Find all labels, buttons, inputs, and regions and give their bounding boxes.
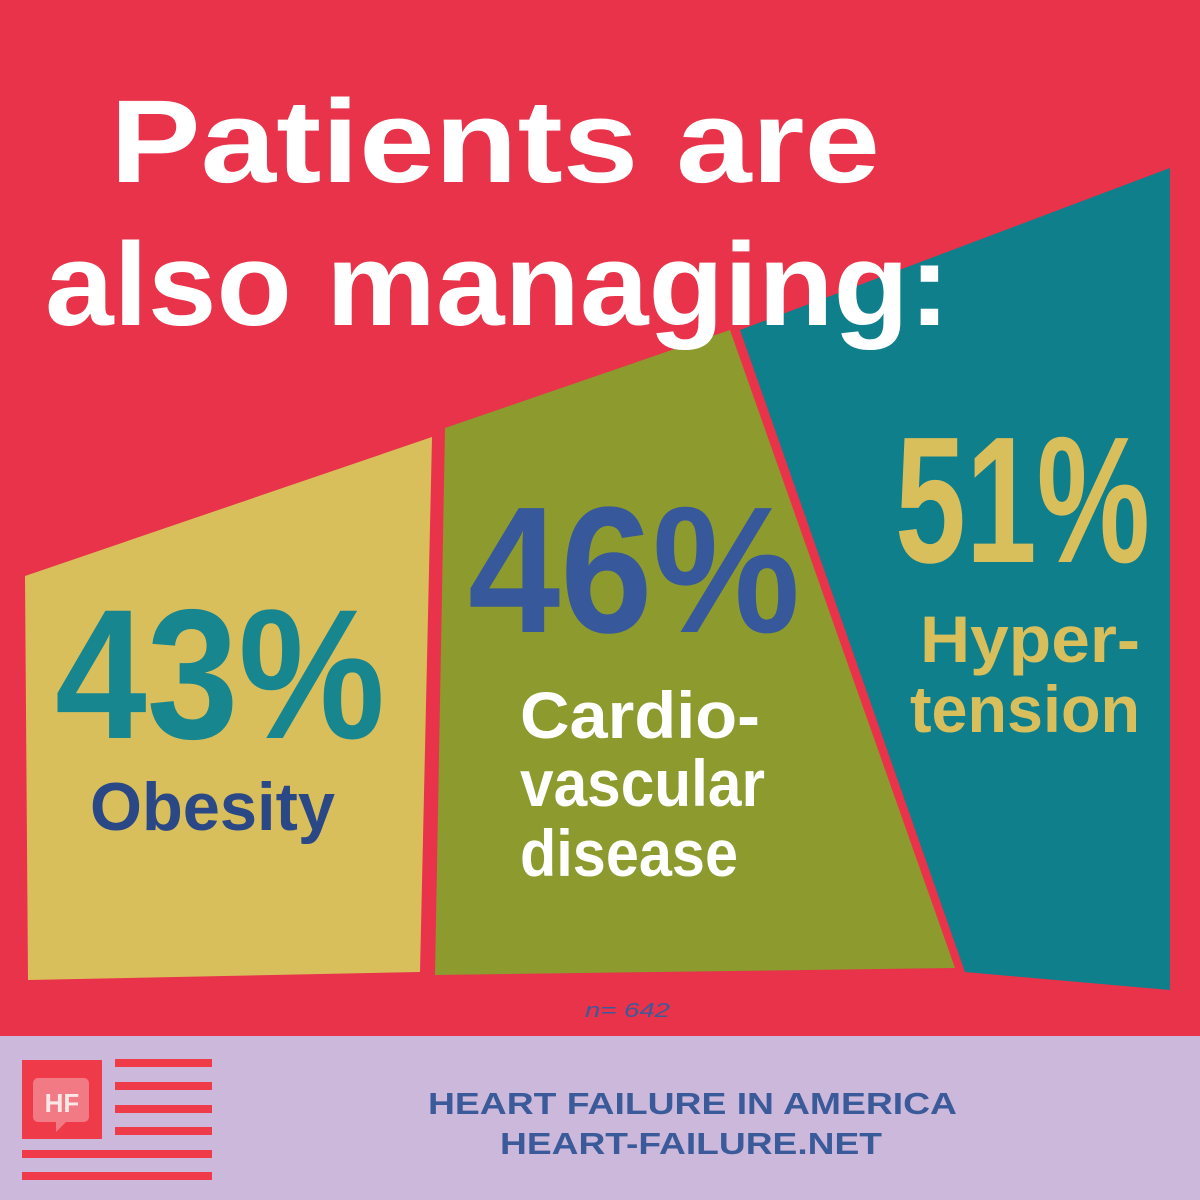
label: Hypertension	[910, 602, 1140, 746]
panel: cardiovascular disease	[435, 330, 955, 975]
title: also managing:	[45, 219, 950, 351]
footer	[0, 1036, 1200, 1200]
title: Patients are	[110, 76, 880, 208]
footer text: HEART-FAILURE.NET	[500, 1126, 882, 1161]
stat: 43%: 43%	[55, 572, 385, 778]
footer text	[428, 1086, 957, 1161]
label: Hypertension: tension	[910, 672, 1140, 746]
stat: 46%: 46%	[468, 470, 800, 671]
label: Cardiovascular disease	[520, 678, 765, 890]
panel: hypertension	[740, 168, 1170, 990]
title	[45, 76, 950, 351]
label: Obesity: Obesity	[90, 769, 335, 845]
label: Hypertension: Hyper-	[920, 602, 1140, 676]
sample size note: n= 642	[585, 1000, 670, 1022]
label: Cardiovascular disease: disease	[520, 816, 738, 890]
panel: obesity	[25, 437, 432, 980]
label: Cardiovascular disease: vascular	[520, 746, 765, 820]
footer text: HEART FAILURE IN AMERICA	[428, 1086, 957, 1121]
label: Cardiovascular disease: Cardio-	[520, 678, 760, 752]
logo	[22, 1059, 212, 1180]
logo: HF	[45, 1088, 79, 1118]
